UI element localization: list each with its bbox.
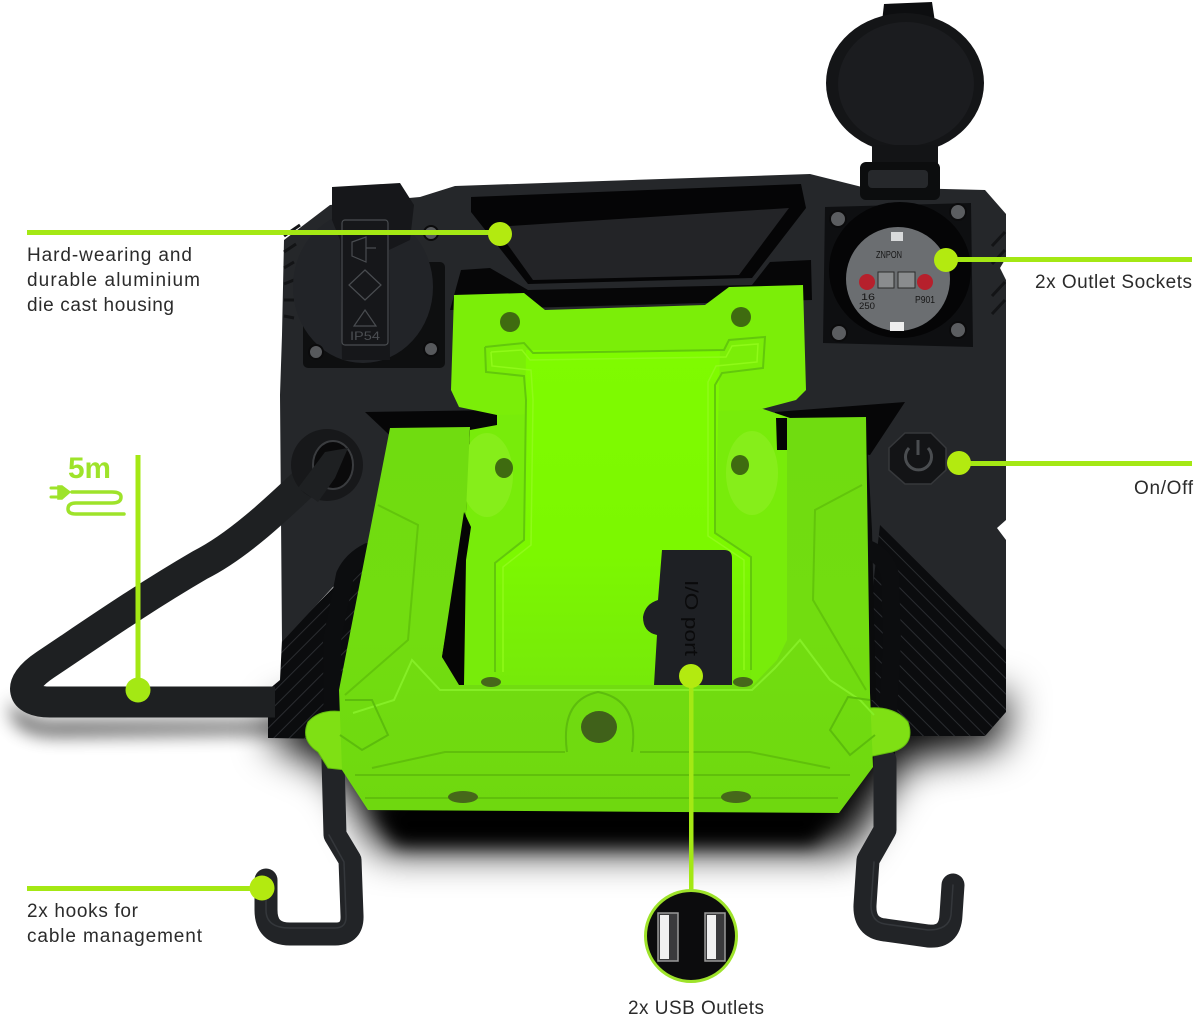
cable gland [291,429,363,502]
housing text: durable aluminium [27,270,200,291]
housing body [280,174,1006,700]
right hook [865,548,953,936]
frame ears [306,708,910,770]
right socket open [823,2,984,347]
lower hatched housing corners [268,505,1006,740]
5m label: 5m [68,452,111,485]
callout: aluminium housing [27,222,512,316]
right arm slit [776,418,787,450]
callout: cable hooks [27,876,274,947]
socket markings: ZNPON [876,250,902,261]
socket markings [859,250,935,311]
drop shadow [11,695,1010,850]
housing text: Hard-wearing and [27,245,192,266]
on/off text: On/Off [1134,478,1194,499]
socket screws [830,204,966,341]
callout: 5m cable [51,452,150,702]
hooks text: cable management [27,926,203,947]
ribbed housing edges [284,225,1005,318]
bracket wedges [365,402,905,455]
product: work light illustration [11,2,1010,936]
housing text: die cast housing [27,295,174,316]
left socket with closed lid [293,183,445,368]
screws [309,226,438,359]
I/O port cover [643,550,732,685]
icon: plug and cable [51,486,124,514]
left hook [266,552,368,934]
hooks text: 2x hooks for [27,901,139,922]
cable [26,450,340,702]
centre hole [581,711,617,743]
port label: I/O port [681,580,701,656]
frame slot [442,512,471,685]
socket markings: 250 [859,301,875,311]
power button [889,433,946,484]
socket markings: 16 [861,292,875,302]
callout: on/off [947,451,1194,499]
lower holes [448,677,753,803]
callout: USB outlets [628,664,764,1017]
pivot bosses [461,433,513,517]
frame ridge lines [340,485,875,798]
socket markings: P901 [915,295,935,306]
sockets text: 2x Outlet Sockets [1035,272,1192,293]
USB inset [646,890,736,982]
lid icon strip [342,220,388,345]
lid rating text: IP54 [350,329,380,343]
socket face [846,227,950,331]
socket lid [826,2,984,200]
black recess behind frame [350,420,876,700]
handle opening [450,184,812,310]
callout: outlet sockets [934,248,1192,293]
U-shaped green frame [339,417,875,813]
mounting holes [495,307,751,478]
green mounting plate [451,285,806,695]
recessed T channel [485,337,765,672]
socket plate [823,203,973,347]
